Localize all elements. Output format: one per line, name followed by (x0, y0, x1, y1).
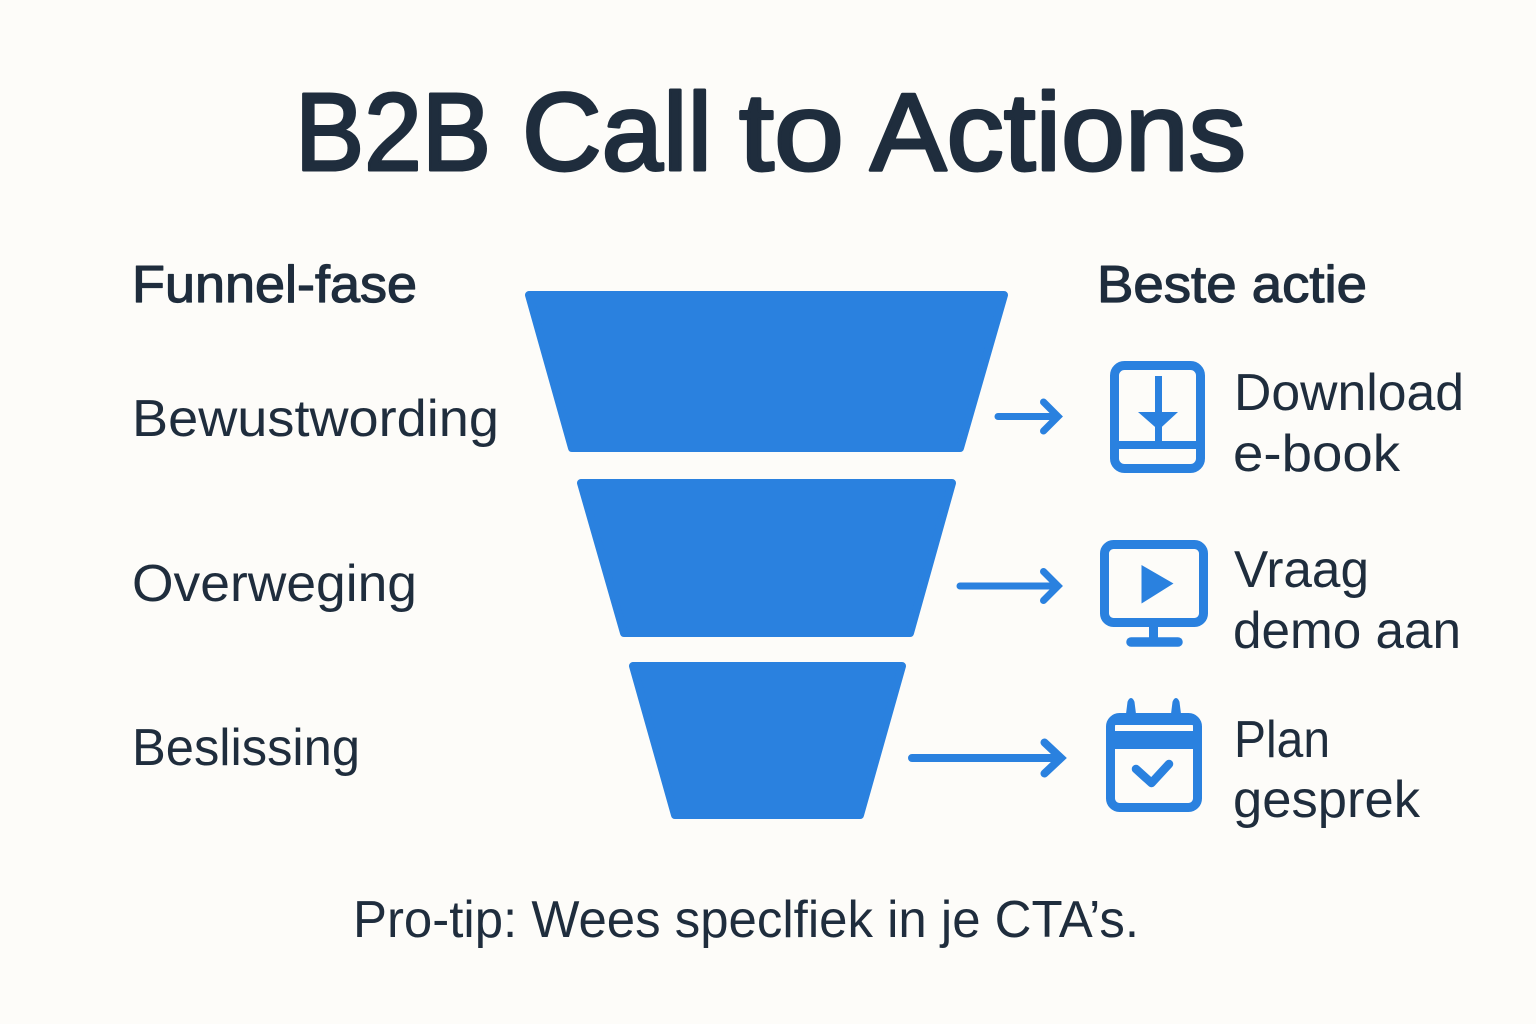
funnel tier 3 (633, 666, 902, 815)
action: plan gesprek (1233, 711, 1421, 829)
label: bewustwording: Bewustwording (132, 390, 499, 448)
funnel tier 1 (529, 295, 1004, 448)
action: plan gesprek: Plan (1234, 711, 1330, 769)
icon: download book (1114, 366, 1200, 468)
pro-tip: Pro-tip: Wees speclfiek in je CTA’s. (353, 891, 1139, 949)
label: overweging: Overweging (132, 555, 417, 613)
action: vraag demo aan (1233, 541, 1461, 660)
action: vraag demo aan: demo aan (1233, 602, 1461, 660)
title (295, 71, 1246, 194)
heading: beste actie: Beste actie (1097, 256, 1367, 314)
action: download e-book (1233, 364, 1464, 483)
arrow 2 (960, 572, 1058, 600)
arrow 3 (912, 742, 1061, 774)
title: Actions (870, 71, 1246, 194)
funnel (529, 295, 1004, 815)
funnel tier 2 (581, 483, 952, 633)
arrow 1 (998, 402, 1058, 431)
action: plan gesprek: gesprek (1233, 771, 1421, 829)
label: beslissing: Beslissing (132, 719, 360, 777)
action: vraag demo aan: Vraag (1234, 541, 1369, 599)
heading: funnel-fase: Funnel-fase (132, 256, 417, 314)
title: Call (522, 71, 712, 194)
icon: demo screen (1104, 544, 1204, 642)
action: download e-book: Download (1234, 364, 1464, 422)
action: download e-book: e-book (1233, 425, 1401, 483)
title: B2B (295, 71, 491, 194)
icon: calendar (1110, 699, 1198, 808)
title: to (739, 71, 844, 194)
